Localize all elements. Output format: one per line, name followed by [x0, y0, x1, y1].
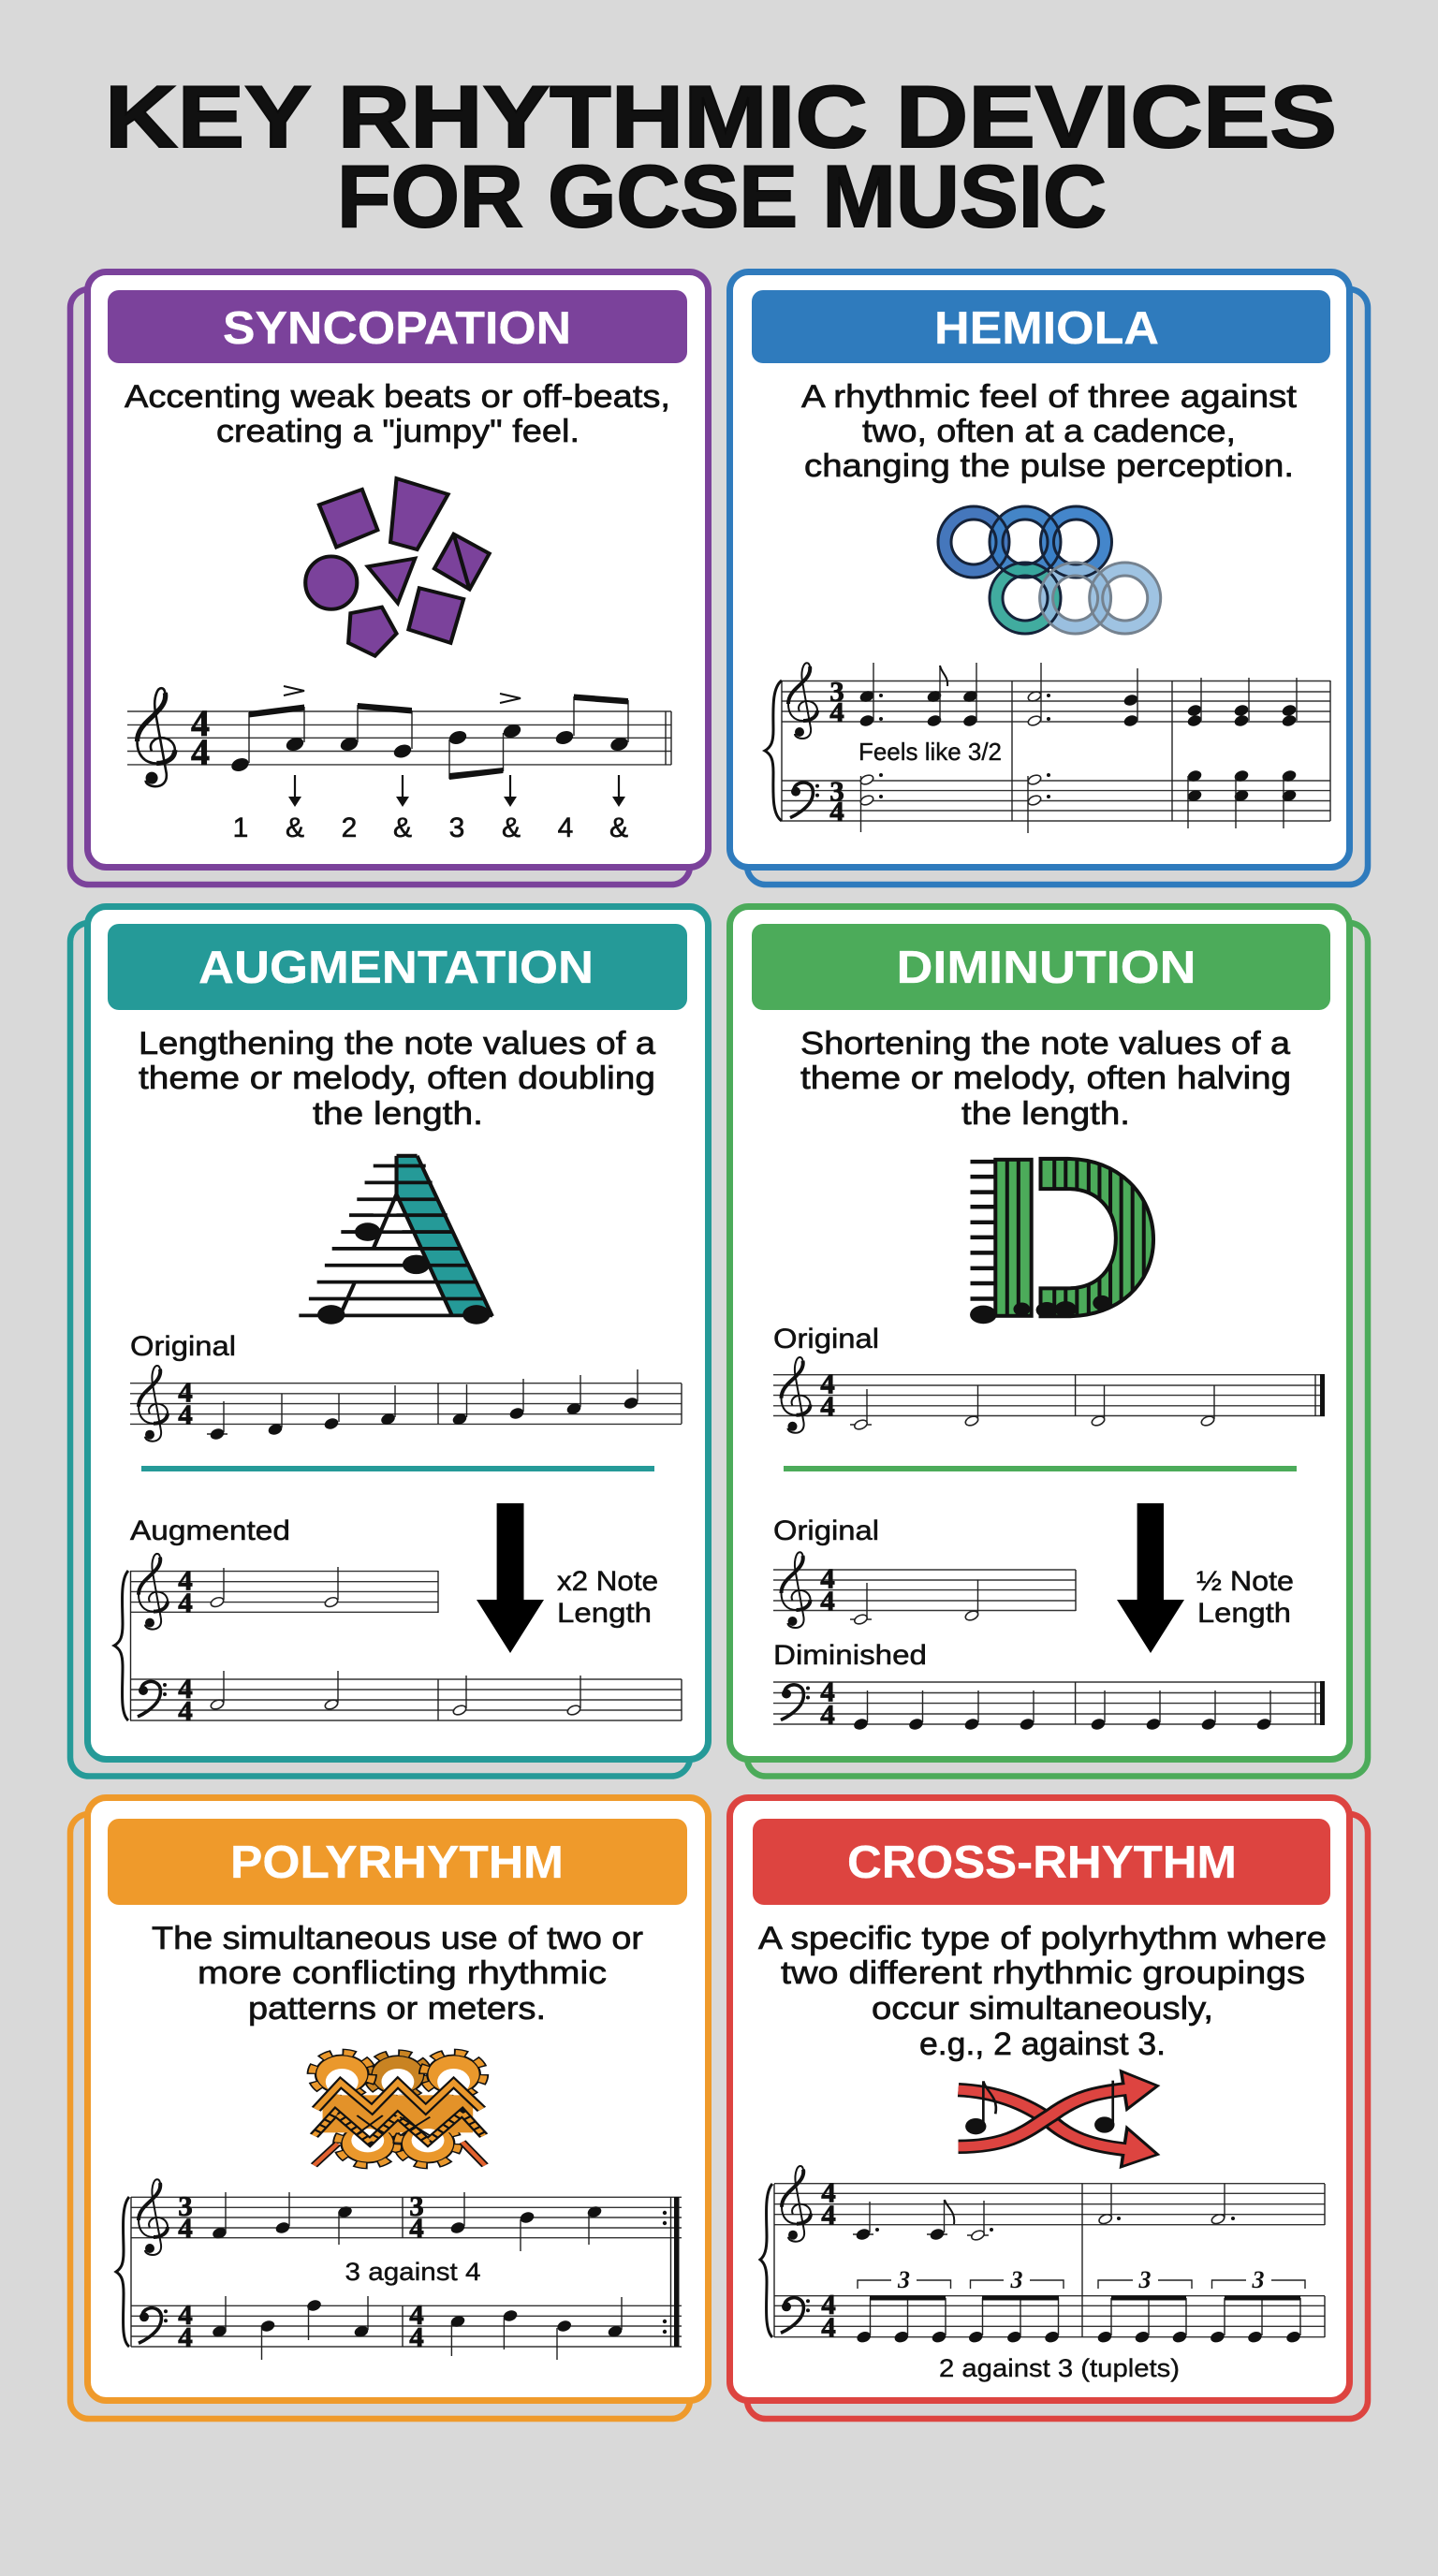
icon: scattered shapes: [305, 478, 490, 656]
music staff: hemiola grand staff: 3: [829, 675, 844, 708]
tuplet brackets: 3: [897, 2266, 910, 2293]
header bar: [752, 290, 1330, 363]
arrow: down: [477, 1503, 544, 1653]
header bar: [753, 1819, 1330, 1905]
music staff: cross-rhythm grand staff: 4: [821, 2175, 836, 2209]
music staff: augmented melody: 4: [178, 1586, 193, 1618]
tuplet brackets: 3: [1251, 2266, 1264, 2293]
description: A specific type of polyrhythm where: [758, 1921, 1327, 1956]
beat count labels: [233, 812, 628, 843]
description: [125, 379, 670, 449]
music staff: diminished melody: 4: [820, 1698, 835, 1731]
music staff: original excerpt: 4: [820, 1584, 835, 1617]
music staff: polyrhythm grand staff: [116, 2179, 682, 2360]
music staff: original melody: 4: [178, 1398, 193, 1430]
music staff: cross-rhythm grand staff: 4: [821, 2199, 836, 2232]
staff annotation: 2 against 3 (tuplets): [939, 2354, 1180, 2382]
music staff: polyrhythm grand staff: 4: [409, 2212, 424, 2245]
label: original: Original: [773, 1515, 879, 1546]
label: augmented: Augmented: [130, 1515, 290, 1546]
tuplet brackets: [858, 2266, 1305, 2293]
music staff: augmented melody: [114, 1554, 682, 1727]
music staff: augmented melody: 4: [178, 1563, 193, 1597]
description: creating a "jumpy" feel.: [216, 414, 580, 449]
arrow label: [1196, 1566, 1294, 1629]
tuplet brackets: 3: [1138, 2266, 1152, 2293]
music staff: hemiola grand staff: 3: [829, 775, 844, 807]
description: theme or melody, often doubling: [139, 1061, 655, 1096]
divider line: [141, 1466, 654, 1471]
music staff: polyrhythm grand staff: 4: [178, 2298, 193, 2331]
heading: AUGMENTATION: [198, 943, 594, 993]
arrow label: ½ Note: [1196, 1566, 1294, 1597]
beat count labels: 2: [342, 812, 357, 843]
music staff: polyrhythm grand staff: 4: [178, 2320, 193, 2353]
title: [105, 67, 1337, 245]
music staff: diminished melody: [773, 1676, 1325, 1732]
description: the length.: [313, 1096, 483, 1132]
panel: cross-rhythm: [730, 1797, 1368, 2419]
description: two, often at a cadence,: [862, 414, 1236, 449]
back card: [747, 289, 1368, 885]
description: [139, 1026, 655, 1132]
description: changing the pulse perception.: [804, 448, 1294, 484]
divider line: [784, 1466, 1297, 1471]
description: e.g., 2 against 3.: [919, 2027, 1166, 2062]
beat count labels: &: [609, 812, 628, 843]
beat count labels: &: [502, 812, 521, 843]
front card: [730, 271, 1350, 867]
off-beat arrows: [288, 775, 625, 807]
music staff: original melody: [773, 1357, 1325, 1433]
title: FOR GCSE MUSIC: [337, 147, 1107, 245]
front card: [730, 906, 1350, 1760]
music staff: augmented melody: 4: [178, 1672, 193, 1705]
description: patterns or meters.: [248, 1991, 546, 2027]
music staff: augmented melody: 4: [178, 1694, 193, 1727]
panel: polyrhythm: [70, 1797, 708, 2419]
music staff: polyrhythm grand staff: 3: [409, 2189, 424, 2222]
description: theme or melody, often halving: [800, 1061, 1291, 1096]
header bar: [752, 924, 1330, 1010]
music staff: original excerpt: 4: [820, 1561, 835, 1595]
arrow: down: [1117, 1503, 1184, 1653]
music staff: cross-rhythm grand staff: 4: [821, 2288, 836, 2320]
description: [800, 1026, 1291, 1132]
panel: diminution: [730, 906, 1368, 1777]
icon: letter A from staff lines: [299, 1156, 492, 1325]
arrow label: x2 Note: [557, 1566, 658, 1597]
heading: HEMIOLA: [934, 303, 1159, 354]
icon: interlocking gears: [312, 2053, 485, 2165]
music staff: cross-rhythm grand staff: 4: [821, 2311, 836, 2344]
music staff: syncopated melody: 4: [191, 702, 210, 744]
panel: syncopation: [70, 271, 708, 885]
music staff: polyrhythm grand staff: 3: [178, 2189, 193, 2222]
arrow label: Length: [557, 1598, 652, 1629]
description: [758, 1921, 1327, 2062]
music staff: polyrhythm grand staff: 4: [178, 2212, 193, 2245]
heading: SYNCOPATION: [223, 303, 571, 354]
heading: CROSS-RHYTHM: [847, 1837, 1237, 1888]
description: the length.: [961, 1096, 1130, 1132]
heading: POLYRHYTHM: [230, 1837, 564, 1888]
beat count labels: 3: [449, 812, 464, 843]
description: occur simultaneously,: [872, 1991, 1213, 2027]
music staff: syncopated melody: [127, 686, 671, 786]
description: two different rhythmic groupings: [781, 1955, 1305, 1991]
back card: [70, 1814, 690, 2419]
music staff: syncopated melody: 4: [191, 731, 210, 773]
back card: [747, 1814, 1368, 2419]
description: more conflicting rhythmic: [198, 1955, 607, 1991]
heading: DIMINUTION: [897, 943, 1196, 993]
music staff: cross-rhythm grand staff: [760, 2166, 1325, 2344]
tuplet brackets: 3: [1009, 2266, 1022, 2293]
music staff: hemiola grand staff: 4: [829, 695, 844, 728]
icon: letter D from staff lines: [970, 1157, 1153, 1324]
description: Shortening the note values of a: [800, 1026, 1290, 1061]
icon: interlocking rings: [938, 506, 1161, 634]
label: original: Original: [773, 1324, 879, 1354]
icon: crossing arrows with notes: [959, 2071, 1157, 2167]
panel: augmentation: [70, 906, 708, 1777]
music staff: original melody: 4: [178, 1376, 193, 1408]
description: The simultaneous use of two or: [152, 1921, 643, 1956]
header bar: [108, 1819, 687, 1905]
description: A rhythmic feel of three against: [801, 379, 1298, 415]
music staff: polyrhythm grand staff: 4: [409, 2320, 424, 2353]
description: Lengthening the note values of a: [139, 1026, 655, 1061]
beat count labels: &: [286, 812, 304, 843]
front card: [730, 1797, 1350, 2400]
front card: [88, 271, 708, 867]
music staff: original melody: [130, 1366, 682, 1442]
beat count labels: 4: [558, 812, 573, 843]
title: KEY RHYTHMIC DEVICES: [105, 67, 1337, 166]
music staff: original excerpt: [773, 1552, 1076, 1628]
music staff: hemiola grand staff: [765, 663, 1330, 833]
header bar: [108, 290, 687, 363]
label: original: Original: [130, 1331, 236, 1362]
music staff: hemiola grand staff: 4: [829, 795, 844, 827]
staff annotation: 3 against 4: [345, 2258, 481, 2286]
panel: hemiola: [730, 271, 1368, 885]
description: Accenting weak beats or off-beats,: [125, 379, 670, 415]
label: diminished: Diminished: [773, 1640, 927, 1671]
beat count labels: &: [393, 812, 412, 843]
back card: [747, 923, 1368, 1777]
front card: [88, 1797, 708, 2400]
description: [801, 379, 1298, 484]
arrow label: Length: [1197, 1598, 1291, 1629]
accent marks: [284, 686, 521, 703]
beat count labels: 1: [233, 812, 248, 843]
music staff: diminished melody: 4: [820, 1676, 835, 1707]
music staff: original melody: 4: [820, 1389, 835, 1423]
description: [152, 1921, 643, 2027]
back card: [70, 289, 690, 885]
arrow label: [557, 1566, 658, 1629]
back card: [70, 923, 690, 1777]
front card: [88, 906, 708, 1760]
music staff: polyrhythm grand staff: 4: [409, 2298, 424, 2331]
staff annotation: Feels like 3/2: [858, 738, 1002, 766]
music staff: original melody: 4: [820, 1367, 835, 1400]
header bar: [108, 924, 687, 1010]
